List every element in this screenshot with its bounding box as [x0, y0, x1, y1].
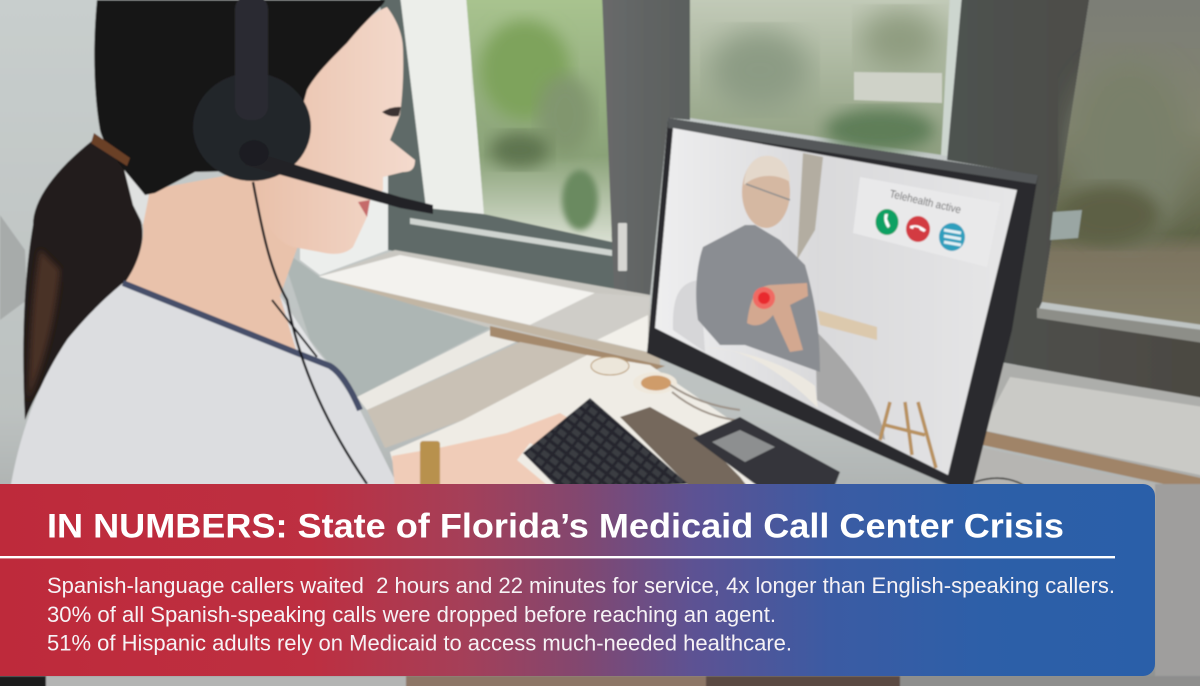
- desk mouse pad: [620, 407, 750, 490]
- video call: pain marker: [753, 287, 775, 309]
- monitor stand base: [693, 417, 840, 490]
- keyboard: [523, 398, 688, 490]
- desk coaster: [591, 357, 629, 375]
- icon: answer call: [876, 209, 898, 235]
- agent hair: [94, 0, 385, 195]
- icon: end call: [906, 216, 930, 242]
- photo: left shelf detail: [0, 215, 27, 320]
- window: pale strip: [941, 0, 962, 156]
- banner panel: [0, 484, 1155, 676]
- agent: [10, 0, 592, 490]
- white wall behind neck: [123, 163, 150, 225]
- monitor frame: [647, 118, 1038, 490]
- statistic: dropped calls: 30% of all Spanish-speaking calls were dropped before reaching an agent.: [47, 602, 776, 627]
- desk cables: [670, 385, 740, 420]
- monitor: [647, 118, 1038, 490]
- agent hair tie: [91, 133, 130, 166]
- video call: patient glasses: [746, 184, 790, 200]
- monitor screen: [655, 128, 1017, 475]
- desk cable grommet: [633, 372, 677, 394]
- right side cable: [975, 478, 1028, 488]
- agent neck: [123, 170, 300, 353]
- floor below sill: [280, 248, 490, 397]
- statistic: wait time: Spanish-language callers waited 2 hours and 22 minutes for service, 4x longer than English-speaking callers.: [47, 573, 1115, 598]
- agent ponytail: [23, 140, 143, 420]
- statistic: Medicaid reliance: 51% of Hispanic adults rely on Medicaid to access much-needed healthcare.: [47, 630, 792, 656]
- desk surface: [357, 330, 520, 410]
- video call: patient head: [741, 172, 790, 228]
- window: middle pane with garden: [690, 0, 950, 155]
- window frame: centre mullion: [602, 0, 690, 296]
- window frame: silver bottom rail: [1037, 308, 1200, 344]
- agent uniform: [10, 283, 400, 490]
- right sill: [980, 362, 1200, 492]
- agent eye: [382, 107, 401, 116]
- banner title: IN NUMBERS: State of Florida’s Medicaid Call Center Crisis: [47, 508, 1064, 546]
- window: handle: [618, 223, 627, 271]
- video call: patient shirt: [696, 225, 820, 372]
- agent face: [250, 7, 415, 254]
- video call: stool: [880, 402, 936, 468]
- video call: patient chair: [673, 280, 705, 352]
- window frame: right mullion: [947, 0, 1200, 400]
- video call: table: [817, 310, 877, 340]
- window frame: left jamb: [380, 0, 650, 296]
- agent bracelet: [420, 441, 440, 490]
- window: left pane with garden: [466, 0, 612, 242]
- video call: patient hands: [747, 283, 808, 352]
- white wall beside face: [300, 170, 388, 275]
- headset: [193, 0, 433, 484]
- video call scene: [673, 153, 936, 468]
- agent hand on keyboard: [392, 413, 592, 490]
- banner statistics: [47, 573, 1115, 656]
- banner divider: [0, 556, 1115, 558]
- window: white reveal: [400, 0, 484, 214]
- agent collar trim: [123, 283, 360, 410]
- video call: background window post: [797, 153, 823, 260]
- left window sill: [317, 250, 650, 365]
- icon: menu: [939, 223, 965, 251]
- video call: patient legs: [815, 330, 885, 440]
- area beside and below banner: [0, 484, 1200, 686]
- telehealth label: Telehealth active: [888, 188, 962, 216]
- window frame: sash rail: [410, 218, 612, 256]
- video call: telehealth controls panel: [853, 177, 1000, 267]
- window: right pane with garden: [1042, 0, 1200, 326]
- agent lips: [358, 200, 370, 217]
